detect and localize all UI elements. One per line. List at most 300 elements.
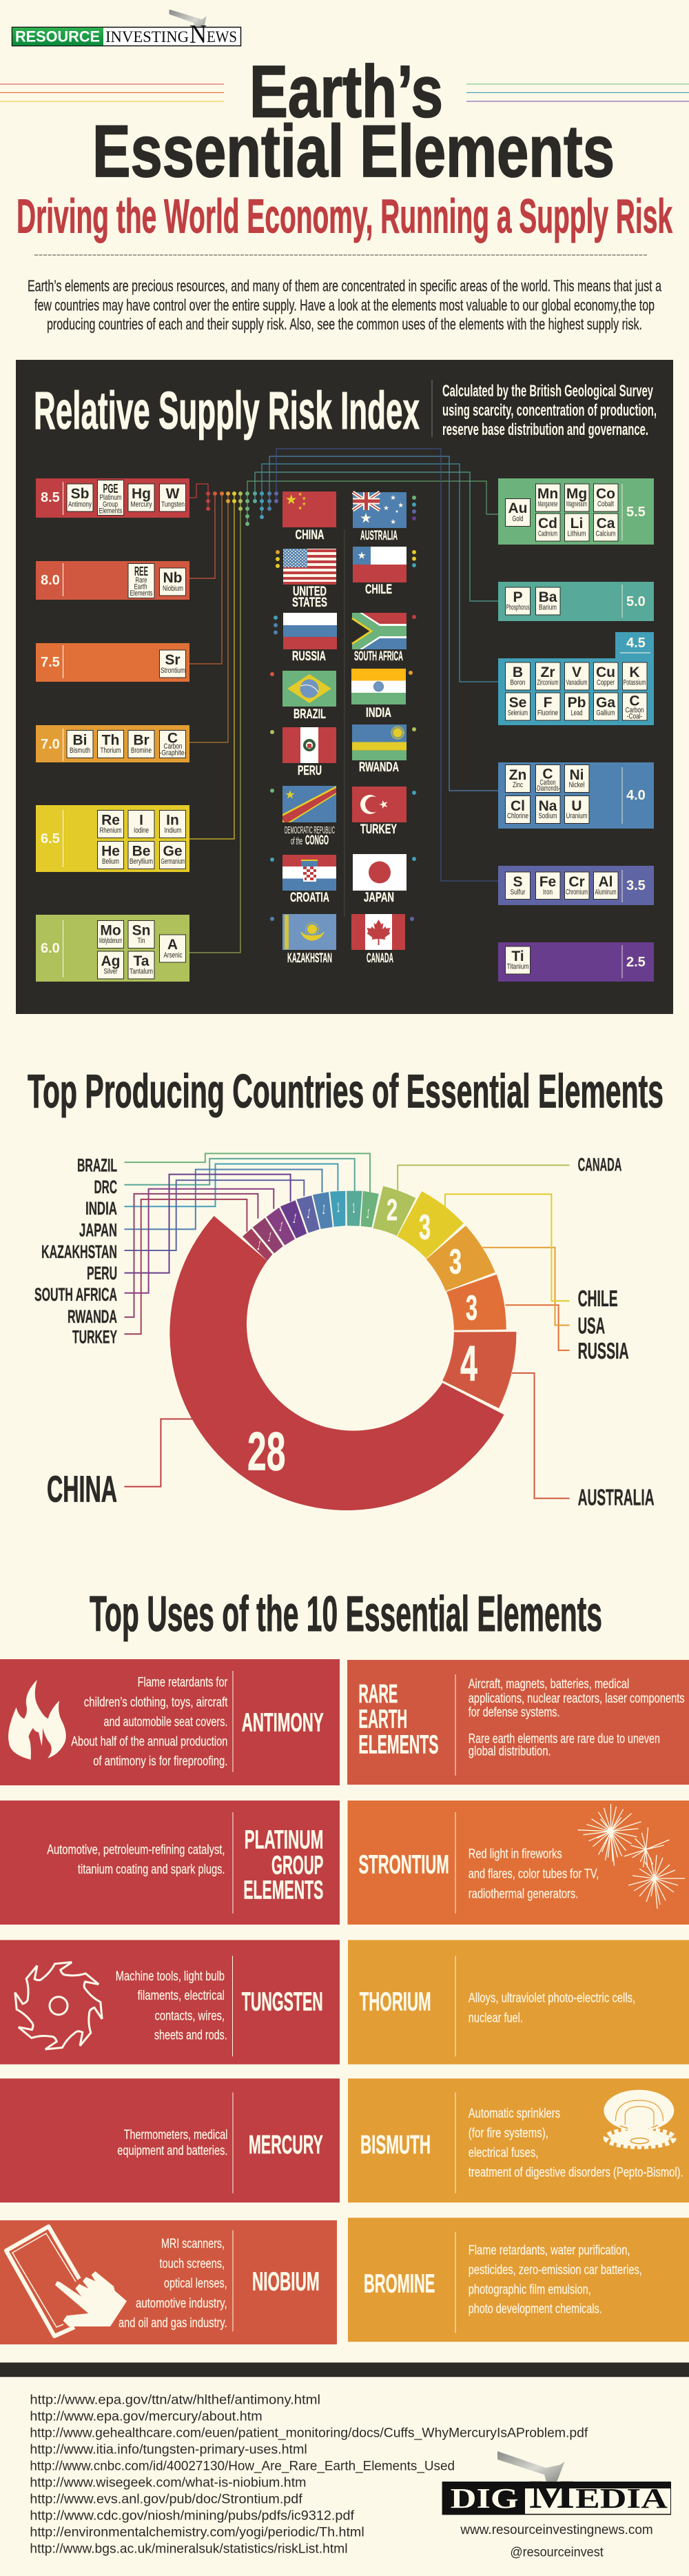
country labels: DRC <box>94 1177 117 1197</box>
tile: Ni <box>565 765 589 793</box>
uses: bromine: photo development chemicals. <box>469 2302 602 2317</box>
tile: Bi: Bi <box>73 732 87 749</box>
country labels: CHILE <box>578 1286 618 1311</box>
tile: Mn <box>536 484 560 511</box>
name: platinum group elements: GROUP <box>271 1851 323 1880</box>
tile: C carbon diamonds: Carbon <box>540 779 555 787</box>
uses: tungsten <box>116 1969 227 2043</box>
country labels: INDIA <box>85 1198 117 1219</box>
tile: C carbon coal <box>623 693 647 721</box>
tile: Th: Thorium <box>101 747 121 755</box>
name: platinum group elements: PLATINUM <box>245 1826 323 1855</box>
tile: Ag: Ag <box>101 953 120 969</box>
flag: Turkey: TURKEY <box>360 822 397 837</box>
segment: USA <box>426 1226 495 1291</box>
source list: http://www.epa.gov/ttn/atw/hlthef/antimony.html <box>30 2393 320 2407</box>
icon: fireworks <box>577 1804 685 1909</box>
tile: Be <box>128 841 154 869</box>
tile: Cd <box>536 514 560 541</box>
uses: strontium: Red light in fireworks <box>469 1847 562 1861</box>
segment: Turkey <box>243 1228 272 1261</box>
uses: strontium: radiothermal generators. <box>469 1887 578 1901</box>
name: antimony: ANTIMONY <box>242 1709 324 1738</box>
tile: B: Boron <box>510 678 525 687</box>
segment values: 2 <box>387 1193 398 1227</box>
tile: S <box>506 872 531 899</box>
flag: Rwanda <box>352 724 416 775</box>
tile: Fe: Iron <box>543 888 553 896</box>
source list: http://www.itia.info/tungsten-primary-uses.html <box>30 2442 307 2457</box>
segment values: 1 <box>338 1201 339 1215</box>
country labels: TURKEY <box>72 1326 117 1347</box>
tile: Hg <box>128 484 154 511</box>
panel: rare earth elements <box>347 1660 689 1785</box>
name: rare earth elements: ELEMENTS <box>358 1730 438 1759</box>
source list <box>30 2393 588 2556</box>
tile: F: Fluorine <box>537 709 558 717</box>
tile: REE: Rare <box>135 576 147 585</box>
flag: Turkey <box>352 787 416 837</box>
source list: http://www.wisegeek.com/what-is-niobium.htm <box>30 2475 307 2490</box>
tile: Ta <box>128 951 154 979</box>
segment: India <box>330 1191 345 1227</box>
flag: Canada <box>351 914 414 966</box>
uses: tungsten: Machine tools, light bulb <box>116 1969 225 1984</box>
tile: Cu <box>594 662 618 690</box>
logo: Resource Investing News: RESOURCE <box>15 28 100 45</box>
tile: Fe <box>536 872 560 899</box>
tile: V <box>565 662 589 690</box>
uses: niobium: touch screens, <box>160 2257 225 2271</box>
segment: Rwanda <box>253 1218 283 1253</box>
flag: United States: UNITED <box>293 585 327 599</box>
uses: antimony: About half of the annual production <box>71 1734 227 1749</box>
risk bar 5.0 <box>498 582 654 621</box>
tile: Bi <box>67 731 93 758</box>
tile: Mg: Mg <box>566 486 587 502</box>
risk bar 7.5 <box>36 643 189 682</box>
tile: C carbon coal: Carbon <box>626 706 644 714</box>
panel: antimony <box>0 1659 340 1785</box>
title: Earth’s <box>249 50 443 132</box>
tile: Th: Th <box>102 732 119 749</box>
intro paragraph <box>28 277 661 333</box>
logo: Dig Media: EDIA <box>575 2482 668 2514</box>
segment values: 1 <box>322 1203 325 1217</box>
name: rare earth elements: EARTH <box>358 1705 407 1734</box>
segment values: 1 <box>292 1212 297 1226</box>
uses: niobium: automotive industry, <box>136 2296 227 2311</box>
tile: Na: Sodium <box>539 812 557 820</box>
tile: Cl: Cl <box>511 798 525 814</box>
tile: C carbon diamonds <box>535 765 560 793</box>
flag: Croatia <box>270 855 336 905</box>
panel: bromine <box>348 2218 689 2342</box>
flag: United States <box>276 549 336 610</box>
uses: rare earth elements: global distribution. <box>469 1745 551 1759</box>
tile: REE: Elements <box>130 589 153 598</box>
tile: B: B <box>513 665 523 680</box>
panel: relative supply risk index: DEMOCRATIC REPUBLIC <box>285 824 335 836</box>
tile: Be: Beryllium <box>130 858 153 866</box>
tile: Co: Co <box>596 486 615 502</box>
tile: Al: Al <box>598 874 613 890</box>
website and handle: @resourceinvest <box>510 2545 604 2559</box>
flag: Brazil: BRAZIL <box>294 707 326 722</box>
uses: bromine: Flame retardants, water purification, <box>469 2243 630 2258</box>
uses: niobium: and oil and gas industry. <box>119 2316 227 2331</box>
flag: Peru: PERU <box>298 764 322 778</box>
tile: Ge: Ge <box>163 844 183 859</box>
icon: saw blade <box>3 1951 114 2061</box>
flag: Chile: CHILE <box>365 582 392 597</box>
tile: C carbon graphite: Carbon <box>164 742 182 751</box>
tile: Zr: Zr <box>540 665 555 680</box>
tile: Sr: Strontium <box>161 667 185 675</box>
tile: C carbon diamonds: C <box>542 767 553 782</box>
source list: http://www.gehealthcare.com/euen/patient_monitoring/docs/Cuffs_WhyMercuryIsAProblem.pdf <box>30 2426 588 2440</box>
flag: Australia <box>353 492 416 543</box>
tile: U <box>565 795 589 823</box>
tile: A: A <box>167 937 178 953</box>
risk bar 6.0: 6.0 <box>41 941 60 956</box>
flag: Democratic Republic of the Congo <box>270 786 336 848</box>
tile: Sr: Sr <box>165 652 181 668</box>
segment values: 1 <box>256 1239 262 1253</box>
footer band <box>0 2362 689 2377</box>
tile: K <box>623 662 647 690</box>
tile: Se <box>506 693 531 720</box>
segment: Japan <box>313 1192 333 1229</box>
tile: Ca: Calcium <box>595 529 616 538</box>
icon: flame <box>8 1680 66 1760</box>
tile: Au: Gold <box>513 515 524 523</box>
risk bar 5.0: 5.0 <box>626 594 646 609</box>
tile: Ge: Germanium <box>161 858 185 866</box>
tile: Be: Be <box>132 844 150 859</box>
tile: PGE <box>98 480 124 516</box>
tile: Ti: Ti <box>511 949 524 964</box>
risk bar 2.5: 2.5 <box>626 955 646 970</box>
tile: Zr <box>536 662 560 690</box>
website and handle: www.resourceinvestingnews.com <box>460 2523 653 2537</box>
flag: Canada: CANADA <box>367 951 393 966</box>
tile: C carbon diamonds: -Diamonds- <box>535 784 560 793</box>
tile: Nb <box>160 568 186 596</box>
logo: Dig Media: DIG <box>451 2482 519 2514</box>
uses: bromine: photographic film emulsion, <box>469 2282 591 2297</box>
tile: A: Arsenic <box>164 951 183 960</box>
tile: Ga <box>594 693 618 720</box>
tile: Co <box>594 484 618 511</box>
risk bar 8.5: 8.5 <box>41 490 60 505</box>
tile: Th <box>98 731 124 758</box>
tile: Mo: Molybdenum <box>99 937 122 945</box>
tile: K: Potassium <box>623 678 646 687</box>
source list: http://www.cdc.gov/niosh/mining/pubs/pdfs/ic9312.pdf <box>30 2508 355 2523</box>
tile: S: Sulfur <box>510 888 526 896</box>
segment values <box>247 1193 477 1482</box>
segment: Russia <box>446 1275 506 1330</box>
uses: bromine <box>469 2243 642 2317</box>
uses: antimony: Flame retardants for <box>138 1676 228 1690</box>
tile: Cd: Cd <box>538 516 557 531</box>
flag: Kazakhstan: KAZAKHSTAN <box>287 951 332 966</box>
flag: India: INDIA <box>366 706 391 720</box>
tile: Ba: Barium <box>539 604 557 612</box>
country labels: RUSSIA <box>578 1338 629 1363</box>
tile: Cr <box>565 872 589 899</box>
country labels: SOUTH AFRICA <box>34 1284 117 1305</box>
tile: Sb <box>67 484 93 511</box>
country labels: RWANDA <box>68 1306 117 1327</box>
tile: Ag: Silver <box>103 968 118 976</box>
risk bar 4.5: 4.5 <box>626 636 646 651</box>
segment: China <box>169 1216 504 1510</box>
tile: I: Iodine <box>134 826 149 835</box>
name: mercury: MERCURY <box>249 2131 323 2160</box>
uses: rare earth elements <box>469 1677 685 1759</box>
index description <box>442 382 657 439</box>
risk bar 5.5 <box>498 478 654 545</box>
tile: W <box>160 484 186 511</box>
tile: Re <box>98 811 124 838</box>
source list: http://www.bgs.ac.uk/mineralsuk/statistics/riskList.html <box>30 2542 348 2556</box>
title <box>92 50 615 192</box>
tile: Mg: Magnesium <box>566 500 587 509</box>
tile: Ga: Gallium <box>597 709 615 717</box>
tile: Hg: Hg <box>132 486 151 502</box>
name: tungsten: TUNGSTEN <box>242 1987 323 2016</box>
risk bar 2.5 <box>498 942 654 982</box>
flag: Democratic Republic of the Congo: CONGO <box>305 833 329 848</box>
tile: REE <box>128 564 154 598</box>
segment: DRC <box>347 1191 362 1226</box>
tile: PGE: Group <box>103 500 118 509</box>
panel: niobium <box>0 2220 337 2344</box>
tile: He <box>98 841 124 869</box>
segment values: 1 <box>366 1207 370 1221</box>
uses: tungsten: sheets and rods. <box>154 2029 227 2043</box>
segment: Kazakhstan <box>296 1195 320 1233</box>
flag: Peru <box>270 727 336 778</box>
flag: China: CHINA <box>295 528 325 542</box>
tile: He: He <box>101 844 120 859</box>
flag: Japan: JAPAN <box>364 891 394 905</box>
tile: Ge <box>160 841 186 869</box>
tile: Cl <box>506 795 531 823</box>
flag: Russia: RUSSIA <box>292 649 326 664</box>
flag: Russia <box>274 613 337 664</box>
tile: Ba <box>536 587 560 615</box>
segment values: 4 <box>460 1336 477 1391</box>
panel: thorium <box>348 1940 689 2065</box>
uses: platinum group elements <box>47 1843 225 1877</box>
segment values: 28 <box>247 1420 285 1482</box>
country labels: CANADA <box>578 1154 621 1175</box>
panel: strontium <box>347 1801 689 1925</box>
connector lines <box>189 449 498 953</box>
uses: thorium <box>469 1991 635 2025</box>
tile: C carbon graphite <box>160 731 187 758</box>
tile: Cl: Chlorine <box>507 812 528 820</box>
tile: B <box>506 662 531 690</box>
tile: Mo <box>98 921 124 949</box>
flag: India <box>351 669 413 720</box>
tile: Sn <box>128 921 154 949</box>
tile: Fe: Fe <box>539 874 556 890</box>
uses: niobium <box>119 2237 227 2331</box>
uses: thorium: nuclear fuel. <box>469 2011 523 2025</box>
tile: C carbon coal: C <box>629 693 640 709</box>
tile: C carbon coal: -Coal- <box>627 713 643 721</box>
risk bar 6.5: 6.5 <box>41 831 60 846</box>
tile: In: In <box>166 812 179 829</box>
panel: relative supply risk index <box>16 360 673 1014</box>
name: bromine: BROMINE <box>364 2270 435 2299</box>
tile: U: U <box>571 798 582 814</box>
segment: Chile <box>397 1191 464 1259</box>
segment values: 3 <box>449 1242 462 1281</box>
tile: F <box>536 693 560 720</box>
title rules right <box>466 83 689 102</box>
tile: Br: Br <box>133 732 150 749</box>
risk bar 3.5 <box>498 866 654 905</box>
tile: Re: Re <box>101 812 120 829</box>
risk bar 7.0 <box>36 725 189 762</box>
tile: Se: Se <box>509 695 526 711</box>
flag: United States: STATES <box>292 596 327 610</box>
source list: http://www.cnbc.com/id/40027130/How_Are_Rare_Earth_Elements_Used <box>30 2459 455 2473</box>
connector dots <box>206 491 278 526</box>
tile: W: W <box>166 486 180 502</box>
uses: niobium: optical lenses, <box>164 2277 227 2291</box>
tile: Sb: Antimony <box>68 500 92 509</box>
risk bar 6.5 <box>36 805 189 872</box>
uses: rare earth elements: Aircraft, magnets, batteries, medical <box>469 1677 629 1692</box>
risk bar 4.5 <box>498 632 654 725</box>
tile: PGE: PGE <box>103 481 119 496</box>
segment values: 1 <box>307 1207 311 1221</box>
tile: Ti: Titanium <box>507 962 529 971</box>
risk bar 4.0 <box>498 762 654 829</box>
tile: V: V <box>572 665 582 680</box>
tile: P: P <box>513 589 523 605</box>
name: bismuth: BISMUTH <box>360 2131 431 2160</box>
segment values: 1 <box>267 1230 272 1245</box>
logo: Resource Investing News: EWS <box>207 28 237 45</box>
segment: Peru <box>280 1200 307 1238</box>
name: rare earth elements <box>358 1680 438 1759</box>
uses: rare earth elements: for defense systems. <box>469 1705 559 1720</box>
uses: platinum group elements: titanium coating and spark plugs. <box>78 1863 225 1877</box>
logo: Dig Media <box>442 2451 671 2517</box>
tile: Pb <box>565 693 589 720</box>
uses: platinum group elements: Automotive, petroleum-refining catalyst, <box>47 1843 225 1857</box>
uses: bismuth: (for fire systems), <box>469 2126 548 2140</box>
flag: Chile <box>353 547 416 597</box>
tile: REE: REE <box>134 564 148 578</box>
tile: Hg: Mercury <box>131 500 152 509</box>
tile: A <box>160 935 186 962</box>
uses: niobium: MRI scanners, <box>161 2237 225 2251</box>
leader lines <box>124 1153 569 1499</box>
segment: Canada <box>373 1186 415 1236</box>
flag: Brazil <box>270 671 336 722</box>
source list: http://environmentalchemistry.com/yogi/periodic/Th.html <box>30 2525 364 2539</box>
tile: Se: Selenium <box>508 709 528 717</box>
tile: I: I <box>139 812 143 829</box>
uses: antimony <box>71 1676 228 1769</box>
logo: Resource Investing News: N <box>189 20 207 49</box>
logo: Resource Investing News <box>12 10 241 49</box>
tile: Mo: Mo <box>100 922 121 939</box>
uses: strontium <box>469 1847 599 1901</box>
country labels: USA <box>578 1312 605 1338</box>
logo: Resource Investing News: INVESTING <box>105 28 189 45</box>
tile: Au <box>506 499 531 527</box>
name: thorium: THORIUM <box>360 1987 431 2016</box>
icon: touch screen <box>6 2227 127 2336</box>
risk bar 5.5: 5.5 <box>626 505 646 520</box>
tile: Zn: Zn <box>509 767 526 783</box>
tile: Co: Cobalt <box>597 500 614 509</box>
risk bar 8.5 <box>36 478 189 518</box>
website and handle <box>460 2523 653 2559</box>
tile: Ca <box>594 514 618 541</box>
tile: Al: Aluminum <box>595 888 616 896</box>
risk bar 8.0: 8.0 <box>41 573 60 588</box>
source list: http://www.evs.anl.gov/pub/doc/Strontium.pdf <box>30 2492 303 2506</box>
tile: Br: Bromine <box>131 747 152 755</box>
segment values: 1 <box>353 1201 355 1216</box>
uses: bismuth <box>469 2107 683 2180</box>
tile: In: Indium <box>164 826 182 835</box>
uses: antimony: children’s clothing, toys, aircraft <box>84 1695 228 1710</box>
country labels: KAZAKHSTAN <box>41 1241 117 1262</box>
uses: antimony: and automobile seat covers. <box>103 1715 227 1730</box>
tile: W: Tungsten <box>161 500 185 509</box>
tile: Na: Na <box>539 798 557 814</box>
flag: Democratic Republic of the Congo: of the <box>291 835 302 847</box>
panel: bismuth <box>348 2078 689 2202</box>
flag: South Africa: SOUTH AFRICA <box>354 649 403 664</box>
tile: Cr: Chromium <box>566 888 588 896</box>
risk bar 3.5: 3.5 <box>626 878 646 893</box>
tile: Mn: Manganese <box>537 500 558 509</box>
tile: Al <box>594 872 618 899</box>
tile: K: K <box>629 665 640 680</box>
uses: mercury: equipment and batteries. <box>117 2144 227 2158</box>
tile: Zn <box>506 765 531 793</box>
tile: Ni: Ni <box>569 767 584 783</box>
tile: He: Belium <box>102 858 119 866</box>
tile: C carbon graphite: -Graphite- <box>160 749 187 757</box>
risk bar 6.0 <box>36 915 189 982</box>
risk bar 4.0: 4.0 <box>626 788 646 803</box>
segment: South Africa <box>266 1208 295 1245</box>
tile: C carbon graphite: C <box>167 731 178 746</box>
tile: PGE: Elements <box>99 507 123 516</box>
tile: Sb: Sb <box>71 486 89 502</box>
uses: thorium: Alloys, ultraviolet photo-electric cells, <box>469 1991 635 2006</box>
flag: Rwanda: RWANDA <box>359 760 399 775</box>
tile: Cu: Cu <box>596 665 615 680</box>
tile: Sn: Sn <box>132 922 150 939</box>
country labels: JAPAN <box>79 1220 117 1241</box>
tile: U: Uranium <box>566 812 587 820</box>
tile: Ti <box>506 946 531 974</box>
